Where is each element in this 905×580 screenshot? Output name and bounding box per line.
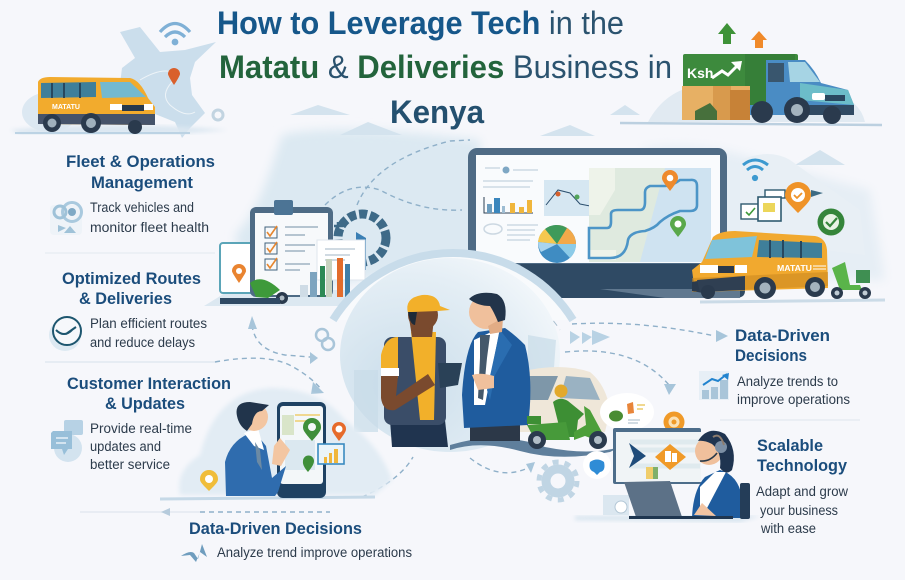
gear	[338, 214, 386, 262]
title	[217, 5, 672, 130]
matatu van	[692, 231, 828, 299]
road swoosh	[450, 438, 620, 457]
laptop frame	[468, 148, 727, 273]
icon: map pin	[168, 68, 180, 85]
illustration: delivery truck	[620, 23, 882, 125]
Kenya map	[118, 27, 216, 138]
right text: scalable technology: your business	[760, 503, 838, 518]
icon: orange location pin	[785, 182, 823, 213]
matatu van left	[38, 77, 155, 134]
pie chart	[538, 225, 576, 263]
title: Kenya	[390, 94, 484, 130]
cardboard boxes	[682, 86, 750, 120]
green scooter right	[831, 262, 871, 299]
left text: customer interaction	[51, 374, 231, 472]
businessman	[225, 402, 290, 496]
left text: fleet and operations: monitor fleet health	[90, 220, 209, 235]
pin: green	[670, 216, 686, 237]
left text: customer interaction: better service	[90, 457, 170, 472]
illustration: connected van, icons and scooter	[700, 154, 885, 302]
woman with headset	[692, 431, 750, 519]
arrow logo	[629, 443, 646, 468]
bar chart on screen	[484, 197, 533, 213]
pin: green	[303, 418, 321, 441]
left text: fleet and operations: Fleet & Operations	[66, 152, 215, 171]
left text: customer interaction: & Updates	[105, 394, 185, 413]
right text: scalable technology: Scalable	[757, 436, 823, 455]
left text: customer interaction: Customer Interaction	[67, 374, 231, 393]
clipboard	[250, 207, 333, 297]
right text: scalable technology	[756, 436, 848, 536]
left text: customer interaction: Provide real-time	[90, 421, 192, 436]
left text: optimized routes: Plan efficient routes	[90, 316, 207, 331]
businessman person	[462, 293, 530, 441]
pin on side card	[232, 264, 246, 283]
bottom text: data-driven decisions: Data-Driven Decisions	[189, 519, 362, 538]
illustration: Kenya map with matatu	[10, 24, 228, 138]
right text: data-driven decisions: Data-Driven	[735, 326, 830, 345]
left text: fleet and operations: Management	[91, 173, 193, 192]
orange diamond	[655, 444, 686, 470]
green scooter with rider	[527, 384, 607, 449]
left text: optimized routes: and reduce delays	[90, 335, 195, 350]
left text: fleet and operations: Track vehicles and	[90, 200, 194, 215]
small ring icon	[316, 329, 334, 350]
arrow up orange	[751, 31, 767, 48]
center bubble with two people	[316, 253, 620, 457]
arrow up green	[718, 23, 736, 44]
bottom text: data-driven decisions: Analyze trend improve operations	[217, 545, 412, 560]
bubble interior	[340, 258, 560, 452]
route map	[589, 168, 711, 262]
small map	[544, 180, 603, 216]
matatu van: MATATU	[777, 263, 812, 273]
laptop screen	[476, 155, 720, 263]
left text: customer interaction: updates and	[90, 439, 161, 454]
illustration: laptop dashboard	[468, 148, 745, 298]
monitor	[613, 428, 701, 484]
background: faded city map behind center	[235, 105, 885, 300]
illustration: man with smartphone	[160, 388, 392, 499]
icon: document cards	[741, 190, 785, 221]
right text: data-driven decisions: Decisions	[735, 346, 807, 365]
left text: optimized routes	[49, 269, 207, 351]
dashed connector arrows	[45, 140, 860, 516]
left text: optimized routes: Optimized Routes	[62, 269, 201, 288]
matatu van left: MATATU	[52, 102, 80, 111]
small camera icon	[603, 495, 629, 515]
bottom text: data-driven decisions	[181, 519, 412, 562]
title: How to Leverage Tech in the	[217, 5, 624, 41]
icon: chat bubble	[583, 451, 611, 479]
icon: tracking	[50, 202, 82, 235]
side card	[220, 243, 255, 293]
icon: leaf and document bubble	[600, 393, 654, 431]
right text: data-driven decisions	[699, 326, 850, 407]
green scooter	[250, 279, 280, 298]
pin: yellow	[200, 470, 218, 491]
icon: rising trend chart	[699, 371, 729, 400]
cargo box green	[683, 54, 798, 88]
right text: scalable technology: with ease	[760, 521, 816, 536]
illustration: customer support agent	[539, 393, 760, 522]
chart card	[318, 444, 344, 464]
left text: optimized routes: & Deliveries	[79, 289, 172, 308]
icon: wifi	[160, 24, 190, 44]
pin: orange	[662, 170, 678, 191]
icon: orange target	[664, 412, 684, 432]
right text: data-driven decisions: Analyze trends to	[737, 374, 838, 389]
pin: orange	[332, 422, 346, 441]
title: Matatu & Deliveries Business in	[219, 49, 672, 85]
icon: clock	[49, 317, 81, 351]
illustration: clipboard and reports	[204, 200, 386, 306]
truck cab	[750, 60, 854, 115]
left text: fleet and operations	[50, 152, 215, 235]
right text: scalable technology: Technology	[757, 456, 848, 475]
gear icon	[539, 462, 577, 500]
icon: green check badge	[818, 208, 844, 236]
report sheet and bar chart	[317, 240, 365, 280]
icon: chat bubbles	[51, 420, 83, 462]
icon: wifi	[743, 160, 768, 180]
right text: data-driven decisions: improve operations	[737, 392, 850, 407]
tablet	[438, 363, 462, 388]
right text: scalable technology: Adapt and grow	[756, 484, 848, 499]
worker person	[381, 295, 450, 447]
phone	[277, 402, 326, 498]
bubble top rim	[333, 253, 573, 320]
icon: trend wave	[181, 544, 207, 562]
auto rickshaw	[520, 367, 610, 432]
illustration: delivery truck: Ksh	[687, 65, 713, 81]
laptop	[624, 481, 733, 519]
pale cloud background	[179, 388, 392, 495]
